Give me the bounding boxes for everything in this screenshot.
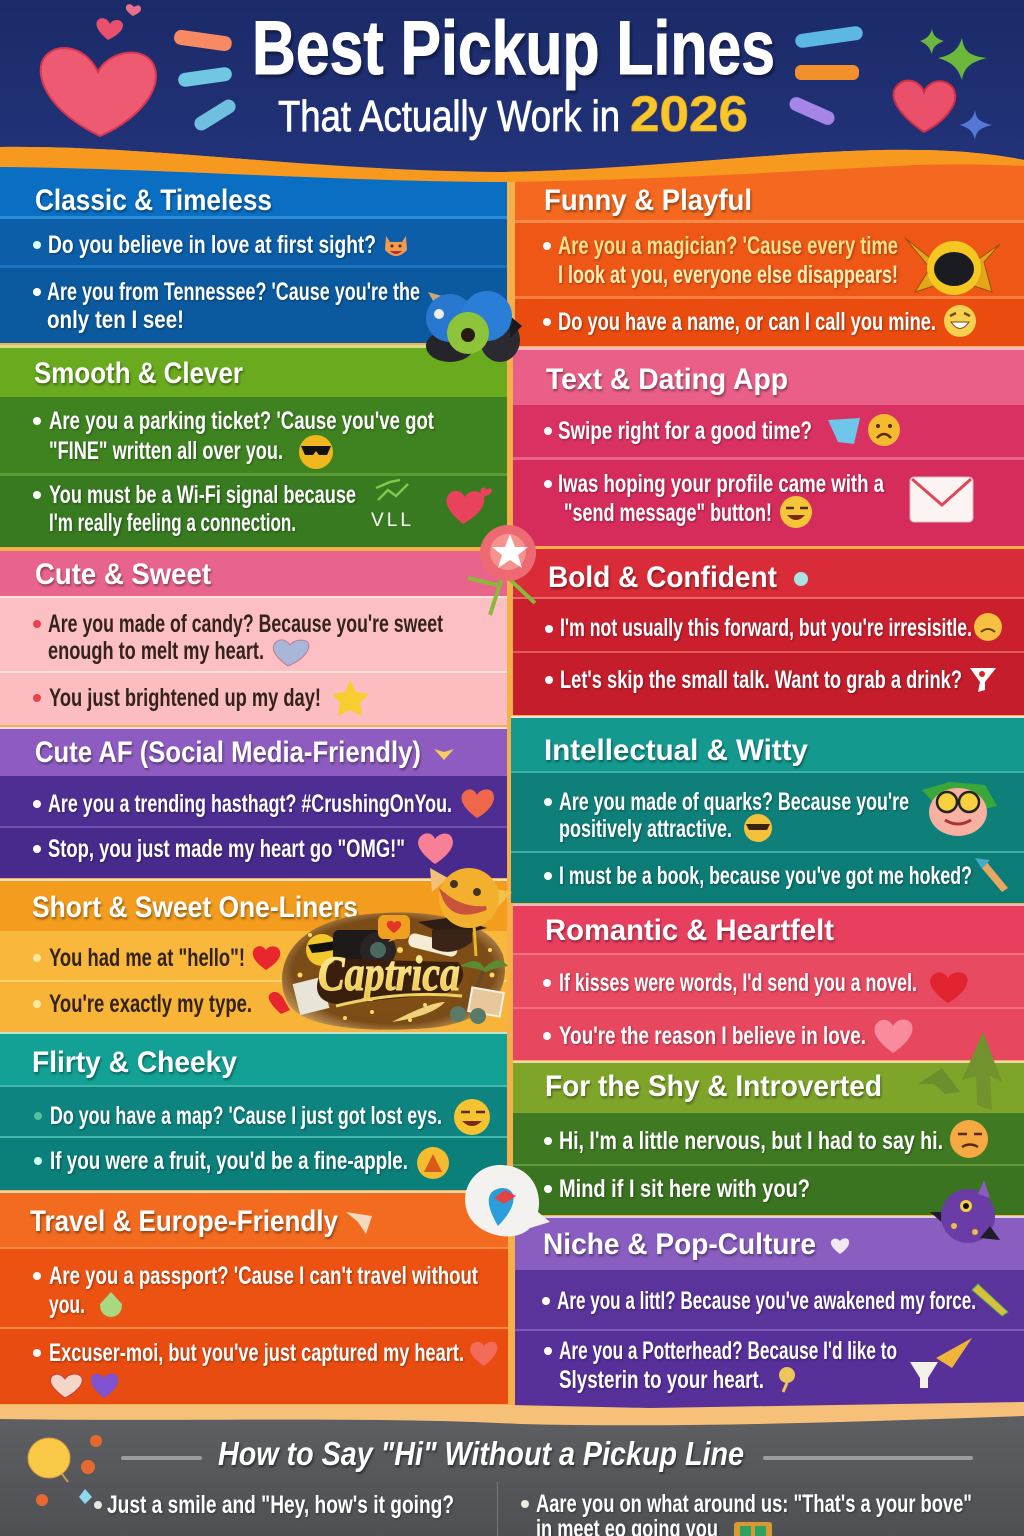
logo underline swash [336,994,462,1006]
icon: green sparkle small [920,29,944,54]
panel: flirty and cheeky [0,1032,507,1190]
icon: flower badge [468,525,536,615]
panel: travel and europe-friendly: Are you a passport? 'Cause I can't travel without [49,1262,478,1290]
panel: smooth and clever: Smooth & Clever [34,357,243,390]
icon: cyan heart [794,572,808,586]
icon: cool face [299,435,333,469]
icon: tiny heart top [126,4,141,16]
icon: glasses face [744,814,772,842]
header banner [0,0,1024,182]
logo: Captrica badge [282,913,508,1030]
icon: small chevron heart [434,749,454,760]
panel: smooth and clever: Are you a parking ticket? 'Cause you've got [49,407,435,435]
icon: sunglasses [450,1006,486,1024]
icon: red heart two [269,992,290,1014]
icon: worried face [974,613,1002,641]
icon: laughing face [944,305,976,337]
panel: cute and sweet: Are you made of candy? Because you're sweet [48,610,443,638]
icon: pencil [975,858,1008,892]
icon: coral heart [470,1342,497,1366]
year: 2026 [630,86,748,142]
footer heading: How to Say "Hi" Without a Pickup Line [218,1435,744,1472]
icon: origami tree [918,1032,1002,1110]
icon: pink heart [874,1019,913,1053]
icon: purple bird [930,1180,1000,1243]
panel: for the shy and introverted: Mind if I sit here with you? [559,1175,810,1203]
icon: golden arrow [936,1338,972,1368]
icon: palm tree [460,960,508,990]
icon: little mountain [100,1292,122,1317]
panel: funny and playful: I look at you, everyone else disappears! [558,261,898,289]
icon: coral heart [462,789,494,818]
panel: short and sweet one-liners: Short & Sweet One-Liners [32,891,358,924]
panel: romantic and heartfelt [513,904,1024,1060]
panel: smooth and clever: "FINE" written all over you. [49,437,283,465]
icon: golden snitch [779,1367,795,1392]
panel: niche and pop-culture: Niche & Pop-Culture [543,1228,816,1261]
icon: heart chat bubble [378,915,410,942]
panel: how to say hi footer: Just a smile and "Hey, how's it going? [107,1491,454,1519]
icon: right heart [894,81,955,132]
panel: text and dating app: "send message" button! [564,499,772,527]
icon: right orange streak [795,65,859,80]
panel: flirty and cheeky: Do you have a map? 'Cause I just got lost eys. [50,1102,442,1130]
panel: short and sweet one-liners: You had me at "hello"! [49,944,245,972]
icon: red heart one [253,946,280,970]
panel: short and sweet one-liners [0,879,507,1030]
icon: blue streak [177,66,233,88]
orange wave [0,147,1024,182]
icon: large heart [41,48,156,136]
panel: intellectual and witty: positively attractive. [559,815,732,843]
logo dark plate [317,959,463,1004]
panel: cute and sweet [0,551,507,725]
icon: camera [333,930,396,968]
panel: cute and sweet: You just brightened up my day! [49,684,321,712]
panel: romantic and heartfelt: You're the reason I believe in love. [559,1022,866,1050]
icon: map pin bubble [465,1165,550,1236]
title: Best Pickup Lines [252,6,775,91]
panel: flirty and cheeky: Flirty & Cheeky [32,1046,237,1079]
panel: romantic and heartfelt: Romantic & Heartfelt [545,914,834,947]
panel: cute AF [0,727,507,878]
logo wordmark: Captrica [318,945,460,1001]
panel: travel and europe-friendly [0,1191,508,1404]
panel: classic and timeless: Do you believe in love at first sight? [48,231,376,259]
icon: sunglasses emoji [306,934,338,966]
icon: sad face [868,414,900,446]
panel: intellectual and witty: Intellectual & Witty [544,734,808,767]
panel: funny and playful: Are you a magician? 'Cause every time [558,232,898,260]
panel: niche and pop-culture [515,1216,1024,1408]
panel: classic and timeless: only ten I see! [47,306,184,334]
panel: bold and confident: Bold & Confident [548,561,777,594]
icon: right blue streak [794,25,864,49]
icon: confetti dots [36,1435,102,1506]
panel: travel and europe-friendly: you. [49,1291,85,1319]
icon: goblet [910,1362,938,1388]
panel: cute AF: Cute AF (Social Media-Friendly) [35,736,421,769]
icon: green window [734,1522,772,1536]
icon: right photo [468,987,504,1017]
panel: classic and timeless: Classic & Timeless [35,184,272,217]
panel: intellectual and witty [511,716,1024,903]
panel: short and sweet one-liners: You're exactly my type. [49,990,252,1018]
icon: right purple streak [787,95,837,127]
icon: small heart top [96,18,123,40]
icon: cocktail [970,668,996,692]
panel: cute and sweet: enough to melt my heart. [48,637,264,665]
panel: text and dating app: Swipe right for a good time? [558,417,812,445]
icon: paper plane [346,1212,372,1234]
panel: funny and playful [515,160,1024,346]
panel: text and dating app: Iwas hoping your profile came with a [558,470,885,498]
icon: left photo [293,977,329,1015]
icon: smiling face [780,496,812,528]
icon: laughing devil face [430,868,512,928]
icon: blue sparkle [960,110,992,140]
panel: how to say hi footer [0,1402,1024,1536]
icon: purple heart [91,1374,118,1398]
panel: smooth and clever [0,345,507,547]
icon: sunglasses mask [905,238,1000,295]
panel: classic and timeless [0,160,507,343]
panel: text and dating app: Text & Dating App [546,363,788,396]
panel: cute and sweet: Cute & Sweet [35,558,211,591]
icon: feather [392,1002,445,1022]
logo sparkles [298,933,494,1022]
icon: orange face [385,236,407,256]
panel: flirty and cheeky: If you were a fruit, you'd be a fine-apple. [50,1147,408,1175]
icon: gem heart [273,640,309,666]
panel: smooth and clever: I'm really feeling a connection. [49,509,296,537]
panel: funny and playful: Funny & Playful [544,184,752,217]
panel: bold and confident [513,549,1024,715]
icon: blue bird mascot [426,291,522,362]
panel: niche and pop-culture: Slysterin to your heart. [559,1366,764,1394]
panel: smooth and clever: You must be a Wi-Fi signal because [49,481,356,509]
icon: nerd mascot [922,782,997,836]
divider left [121,1456,202,1460]
icon: small blue streak [192,97,238,133]
icon: signal bars [371,480,411,531]
panel: text and dating app [513,347,1024,546]
icon: blue tile [828,418,860,444]
icon: yellow balloon [28,1438,70,1482]
icon: pink heart [418,833,453,864]
panel: travel and europe-friendly: Excuser-moi, but you've just captured my heart. [49,1339,464,1367]
panel: for the shy and introverted: For the Shy & Introverted [545,1070,882,1103]
icon: green sparkle large [938,38,987,80]
icon: red heart [930,972,968,1003]
icon: winged heart [50,1374,82,1398]
subtitle: That Actually Work in [278,92,620,141]
icon: white heart [831,1238,849,1254]
panel: classic and timeless: Are you from Tennessee? 'Cause you're the [47,278,420,306]
icon: star [332,680,369,716]
icon: signal bars: VLL [371,510,411,531]
panel: for the shy and introverted [513,1032,1024,1215]
icon: envelope [910,477,973,522]
panel: cute AF: Are you a trending hasthagt? #CrushingOnYou. [48,790,452,818]
panel: travel and europe-friendly: Travel & Europe-Friendly [30,1205,338,1238]
icon: diploma [407,932,459,958]
icon: shy face [950,1120,988,1158]
icon: graduation cap [418,917,487,956]
icon: winking face [454,1099,490,1135]
divider right [763,1456,973,1460]
panel: cute AF: Stop, you just made my heart go "OMG!" [48,835,405,863]
icon: fan face [417,1147,449,1179]
icon: coral streak [173,29,233,52]
icon: wand [972,1284,1008,1316]
icon: red heart [446,491,484,524]
